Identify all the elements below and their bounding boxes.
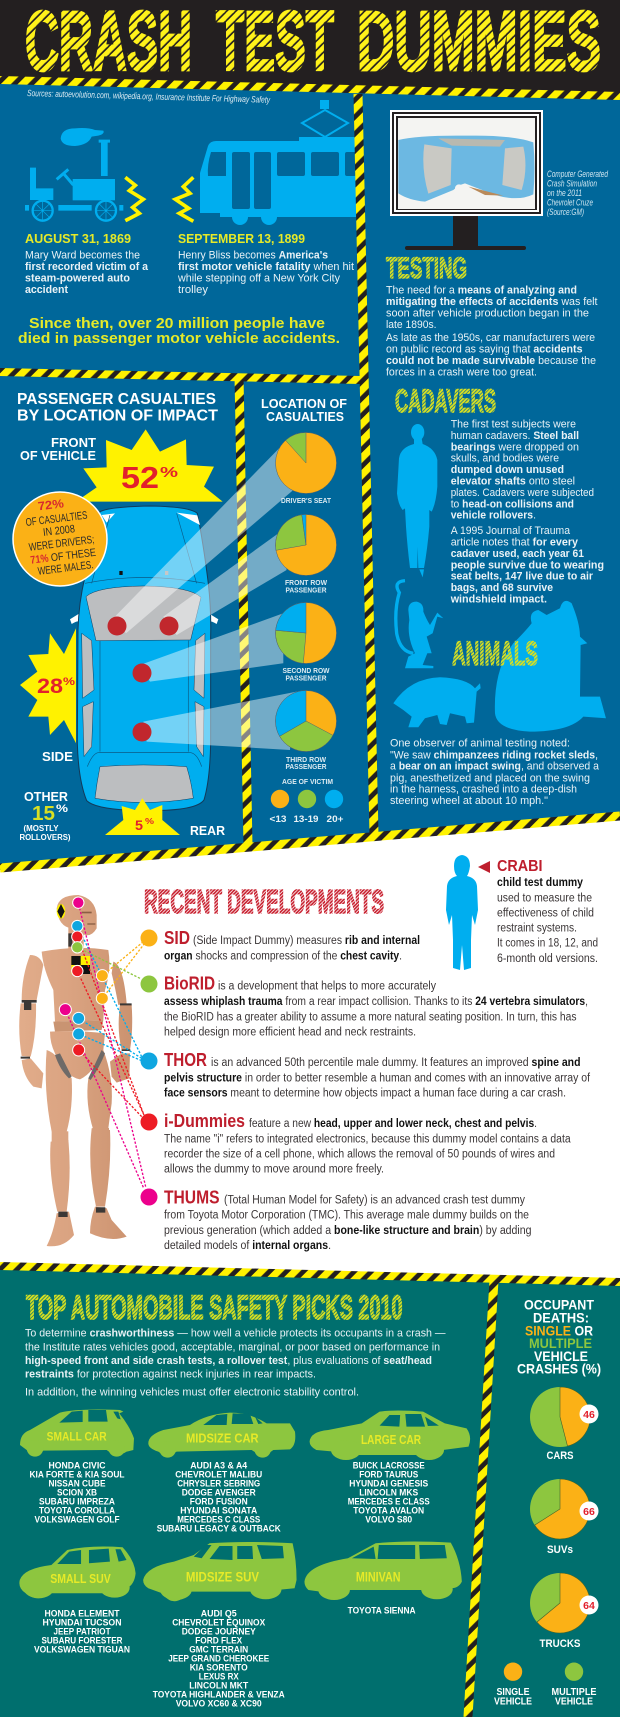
pie: trucks 64: TRUCKS xyxy=(540,1638,580,1650)
list: midsize cars: DODGE AVENGER xyxy=(182,1487,256,1498)
text: safety picks intro: high-speed front and side crash tests, a rollover test, plus evaluations of seat/head xyxy=(25,1355,432,1367)
sources line: Sources: autoevolution.com, wikipedia.org, Insurance Institute For Highway Safety xyxy=(27,88,270,105)
list: large cars: TOYOTA AVALON xyxy=(353,1505,424,1516)
text: August 1869: first recorded victim of a xyxy=(25,261,149,273)
text: CRABI: child test dummy xyxy=(497,877,584,889)
text: cadavers: skulls, and bodies were xyxy=(451,453,559,465)
list: midsize cars: AUDI A3 & A4 xyxy=(190,1460,248,1471)
heading: passenger casualties xyxy=(17,391,219,425)
panel: history and testing background xyxy=(0,80,620,870)
starburst: side 28%: 28 xyxy=(37,675,63,698)
legend: age of victim: <13 xyxy=(270,814,286,824)
icon: large car: LARGE CAR xyxy=(361,1433,421,1448)
stat: 72 percent drivers: OF CASUALTIES xyxy=(25,510,88,529)
label: rear: REAR xyxy=(190,824,225,838)
heading: occupant deaths xyxy=(517,1296,601,1377)
text: August 1869: steam-powered auto xyxy=(25,272,130,284)
car top view xyxy=(70,506,218,811)
list: small SUVs: HYUNDAI TUCSON xyxy=(42,1618,122,1629)
list: midsize SUVs xyxy=(153,1609,285,1710)
THOR entry: THOR xyxy=(164,1050,207,1070)
heading: location of casualties: CASUALTIES xyxy=(266,409,344,424)
stat: 72 percent drivers: WERE DRIVERS; xyxy=(28,534,95,554)
list: midsize SUVs: VOLVO XC60 & XC90 xyxy=(176,1699,262,1710)
text: safety picks intro: To determine crashworthiness — how well a vehicle protects its occupants in a crash — xyxy=(25,1328,446,1340)
SID entry: SID xyxy=(164,928,190,948)
list: midsize cars: HYUNDAI SONATA xyxy=(180,1505,257,1516)
text: testing: As late as the 1950s, car manufacturers were xyxy=(386,332,595,344)
heading: cadavers: CADAVERS xyxy=(395,383,496,419)
list: small SUVs: SUBARU FORESTER xyxy=(42,1636,123,1647)
text: testing: could not be made survivable because the xyxy=(386,355,596,367)
label: front of vehicle xyxy=(20,436,96,463)
list: midsize SUVs: TOYOTA HIGHLANDER & VENZA xyxy=(153,1690,285,1701)
text: September 1899: SEPTEMBER 13, 1899 xyxy=(178,232,305,246)
heading: testing: TESTING xyxy=(386,252,467,285)
text: cadavers: dumped down unused xyxy=(451,464,564,476)
BioRID entry: helped design more efficient head and neck restraints. xyxy=(164,1026,416,1038)
heading: location of casualties xyxy=(261,396,347,424)
text: August 1869: accident xyxy=(25,284,68,296)
text: cadavers xyxy=(450,418,604,606)
icon: human silhouette xyxy=(397,424,437,577)
text: testing: on public record as saying that accidents xyxy=(386,344,582,356)
list: small SUVs xyxy=(34,1609,130,1656)
list: small cars xyxy=(30,1460,125,1525)
pie labels: AGE OF VICTIM xyxy=(282,777,333,786)
text: testing: mitigating the effects of accidents was felt xyxy=(386,296,598,308)
pie labels: THIRD ROW xyxy=(286,755,327,764)
dummy sensor dots xyxy=(59,897,108,1056)
heading: occupant deaths: CRASHES (%) xyxy=(517,1361,601,1377)
icon: small car: SMALL CAR xyxy=(47,1430,107,1444)
text: cadavers: The first test subjects were xyxy=(451,418,576,430)
pie: SUVs 66: SUVs xyxy=(547,1544,573,1556)
label: side: SIDE xyxy=(42,750,73,764)
pie: SUVs 66: 66 xyxy=(583,1506,595,1518)
text: cadavers: plates. Cadavers were subjected xyxy=(451,487,594,499)
list: midsize SUVs: LEXUS RX xyxy=(199,1672,239,1683)
crash test dummy figure xyxy=(19,895,132,1246)
list: minivans: TOYOTA SIENNA xyxy=(348,1605,416,1616)
starburst: front 52%: 52 xyxy=(121,460,159,495)
monitor with crash simulation xyxy=(390,110,543,250)
pie: trucks 64 xyxy=(530,1573,598,1650)
legend: single or multiple vehicle: VEHICLE xyxy=(494,1697,532,1708)
text: CRABI: effectiveness of child xyxy=(497,908,594,920)
list: small cars: HONDA CIVIC xyxy=(48,1460,106,1471)
legend: age of victim: 13-19 xyxy=(294,814,318,824)
text: animals: steering wheel at about 10 mph." xyxy=(390,795,548,807)
SID entry: organ shocks and compression of the chest cavity. xyxy=(164,950,402,962)
i-Dummies entry: i-Dummies xyxy=(164,1111,245,1131)
stat: 72 percent drivers: IN 2008 xyxy=(42,523,76,539)
monitor caption: Chevrolet Cruze xyxy=(547,198,593,208)
pie labels: DRIVER'S SEAT xyxy=(281,496,331,505)
icon: small SUV: SMALL SUV xyxy=(50,1572,111,1587)
list: midsize SUVs: KIA SORENTO xyxy=(190,1663,248,1674)
icon: minivan xyxy=(304,1541,462,1600)
text: animals: in the harness, crashed into a deep-dish xyxy=(390,784,577,796)
heading: location of casualties: LOCATION OF xyxy=(261,396,347,411)
i-Dummies entry: The name "i" refers to integrated electronics, because this dummy model contains a data xyxy=(164,1133,571,1145)
text: CRABI: CRABI xyxy=(497,858,542,875)
text: testing: The need for a means of analyzing and xyxy=(386,284,577,296)
callout: 20 million xyxy=(18,315,340,347)
icon: large car xyxy=(310,1410,470,1460)
light beams from seats to pies xyxy=(113,444,297,750)
monitor caption: on the 2011 xyxy=(547,188,582,198)
stat: other 15%: ROLLOVERS) xyxy=(20,833,71,842)
stat: 72 percent drivers: 72% xyxy=(37,496,65,513)
i-Dummies entry xyxy=(140,1111,571,1176)
list: large cars: HYUNDAI GENESIS xyxy=(349,1478,428,1489)
text: testing: late 1890s. xyxy=(386,319,436,331)
starburst: front 52% xyxy=(76,429,223,502)
icon: midsize car: MIDSIZE CAR xyxy=(186,1430,259,1445)
heading: occupant deaths: SINGLE OR xyxy=(525,1322,593,1338)
text: testing: forces in a crash were too great. xyxy=(386,366,537,378)
text: CRABI xyxy=(497,858,598,965)
legend: age of victim xyxy=(270,790,344,824)
i-Dummies entry: recorder the size of a cell phone, which allows the removal of 50 pounds of wires and xyxy=(164,1149,555,1161)
monitor caption: Crash Simulation xyxy=(547,178,597,188)
list: midsize cars xyxy=(157,1460,281,1534)
monitor caption: (Source:GM) xyxy=(547,207,584,217)
CRABI arrow xyxy=(478,861,490,873)
list: midsize cars: CHRYSLER SEBRING xyxy=(177,1478,260,1489)
icon: midsize car xyxy=(148,1413,295,1458)
text: September 1899: trolley xyxy=(178,284,209,296)
label: front of vehicle: OF VEHICLE xyxy=(20,449,96,463)
stat: 72 percent drivers: WERE MALES. xyxy=(37,559,94,578)
BioRID entry: the BioRID has a greater ability to assume a more natural seating position. In turn, this has xyxy=(164,1011,577,1023)
stat: 72 percent drivers: 71% OF THESE xyxy=(30,547,97,567)
text: animals: "We saw chimpanzees riding rocket sleds, xyxy=(390,749,598,761)
text: safety picks intro: In addition, the winning vehicles must offer electronic stability control. xyxy=(25,1386,359,1398)
callout: 20 million: died in passenger motor vehicle accidents. xyxy=(18,330,340,347)
list: midsize SUVs: LINCOLN MKT xyxy=(189,1681,248,1692)
THUMS entry: previous generation (which added a bone-like structure and brain) by adding xyxy=(164,1225,532,1237)
stat: 72 percent drivers xyxy=(13,492,107,586)
text: cadavers: people survive due to wearing xyxy=(451,559,604,571)
text: CRABI: It comes in 18, 12, and xyxy=(497,938,598,950)
legend: single or multiple vehicle: VEHICLE xyxy=(555,1697,593,1708)
monitor caption xyxy=(547,169,609,217)
text: cadavers: seat belts, 147 live due to air xyxy=(451,571,594,583)
stat: other 15% xyxy=(20,790,71,842)
text: testing xyxy=(386,284,598,378)
icon: midsize SUV xyxy=(143,1542,297,1601)
SID entry xyxy=(140,928,420,962)
list: midsize cars: CHEVROLET MALIBU xyxy=(175,1469,262,1480)
pie: trucks 64: 64 xyxy=(583,1600,595,1612)
text: animals: a bear on an impact swing, and observed a xyxy=(390,761,600,773)
pie labels xyxy=(281,496,333,786)
heading: passenger casualties: BY LOCATION OF IMPACT xyxy=(17,408,219,425)
icon: steam tricycle xyxy=(25,128,123,221)
stat: other 15%: (MOSTLY xyxy=(24,824,59,833)
starburst: front 52%: % xyxy=(160,464,178,481)
starburst: rear 5% xyxy=(105,798,180,835)
text: safety picks intro: restraints for protection against neck injuries in rear impacts. xyxy=(25,1369,316,1381)
SID entry: (Side Impact Dummy) measures rib and internal xyxy=(193,935,420,947)
text: September 1899 xyxy=(177,232,354,296)
legend: single or multiple vehicle: SINGLE xyxy=(496,1687,530,1698)
THUMS entry: (Total Human Model for Safety) is an advanced crash test dummy xyxy=(224,1194,525,1206)
THOR entry: face sensors meant to determine how objects impact a human face during a car crash. xyxy=(164,1088,566,1100)
text: cadavers: to head-on collisions and xyxy=(451,498,574,510)
label: front of vehicle: FRONT xyxy=(51,436,96,450)
icon: trolley xyxy=(200,100,356,225)
pie: cars 46: 46 xyxy=(583,1409,595,1421)
heading: occupant deaths: VEHICLE xyxy=(534,1348,588,1364)
THOR entry: is an advanced 50th percentile male dummy. It features an improved spine and xyxy=(211,1057,580,1069)
icon: minivan: MINIVAN xyxy=(356,1570,401,1585)
text: safety picks intro: the Institute rates vehicles good, acceptable, marginal, or poor based on performance in xyxy=(25,1341,440,1353)
text: August 1869 xyxy=(25,232,149,296)
seat markers xyxy=(108,616,178,742)
title xyxy=(25,0,601,88)
heading: occupant deaths: MULTIPLE xyxy=(529,1335,592,1351)
THUMS entry: detailed models of internal organs. xyxy=(164,1240,331,1252)
pie: cars 46: CARS xyxy=(546,1450,574,1462)
starburst: rear 5%: % xyxy=(145,817,154,826)
callout: 20 million: Since then, over 20 million people have xyxy=(29,315,325,332)
stat: other 15%: % xyxy=(56,803,68,815)
legend: single or multiple vehicle: MULTIPLE xyxy=(552,1687,597,1698)
list: midsize SUVs: CHEVROLET EQUINOX xyxy=(172,1618,266,1629)
list: large cars: FORD TAURUS xyxy=(359,1469,418,1480)
list: midsize SUVs: DODGE JOURNEY xyxy=(182,1627,256,1638)
i-Dummies entry: allows the dummy to move around more freely. xyxy=(164,1164,384,1176)
pie: driver's seat xyxy=(276,432,336,494)
text: September 1899: Henry Bliss becomes America's xyxy=(178,250,328,262)
list: small cars: TOYOTA COROLLA xyxy=(39,1505,115,1516)
text: cadavers: human cadavers. Steel ball xyxy=(451,430,579,442)
list: small SUVs: HONDA ELEMENT xyxy=(44,1609,120,1620)
THUMS entry: THUMS xyxy=(164,1187,220,1207)
list: large cars: MERCEDES E CLASS xyxy=(348,1496,430,1507)
heading: occupant deaths: OCCUPANT xyxy=(524,1296,594,1312)
pie labels: FRONT ROW xyxy=(285,578,328,587)
icon: child dummy silhouette xyxy=(446,855,478,970)
icon: monkey silhouette xyxy=(396,581,443,668)
text: cadavers: cadaver used, each year 61 xyxy=(451,548,584,560)
THUMS entry: from Toyota Motor Corporation (TMC). This average male dummy builds on the xyxy=(164,1210,529,1222)
i-Dummies entry: feature a new head, upper and lower neck, chest and pelvis. xyxy=(249,1118,537,1130)
text: CRABI: used to measure the xyxy=(497,892,592,904)
header background xyxy=(0,0,620,104)
heading: passenger casualties: PASSENGER CASUALTIES xyxy=(17,391,216,408)
list: small cars: VOLKSWAGEN GOLF xyxy=(34,1514,120,1525)
pie: third row xyxy=(275,690,336,752)
text: animals: One observer of animal testing noted: xyxy=(390,738,570,750)
list: midsize cars: MERCEDES C CLASS xyxy=(177,1514,260,1525)
pie labels: PASSENGER xyxy=(286,674,327,682)
list: midsize SUVs: AUDI Q5 xyxy=(201,1609,237,1620)
heading: animals: ANIMALS xyxy=(452,635,538,673)
list: large cars: LINCOLN MKS xyxy=(359,1487,418,1498)
text: testing: soon after vehicle production began in the xyxy=(386,308,589,320)
BioRID entry: assess whiplash trauma from a rear impact collision. Thanks to its 24 vertebra simulators, xyxy=(164,996,588,1008)
text: September 1899: first motor vehicle fatality when hit xyxy=(178,261,354,273)
list: midsize SUVs: GMC TERRAIN xyxy=(189,1645,248,1656)
text: safety picks intro xyxy=(25,1328,446,1398)
icon: midsize SUV: MIDSIZE SUV xyxy=(186,1570,260,1585)
BioRID entry: is a development that helps to more accurately xyxy=(218,980,436,992)
text: August 1869: AUGUST 31, 1869 xyxy=(25,232,131,246)
heading: recent developments: RECENT DEVELOPMENTS xyxy=(144,883,384,920)
starburst: side 28% xyxy=(20,628,76,743)
text: cadavers: elevator shafts onto steel xyxy=(451,475,575,487)
connector lines xyxy=(65,903,146,1187)
starburst: side 28%: % xyxy=(63,676,75,688)
text: cadavers: article notes that for every xyxy=(451,537,579,549)
list: midsize SUVs: FORD FLEX xyxy=(195,1636,243,1647)
icon: crash burst right xyxy=(175,177,193,221)
text: cadavers: bags, and 68 survive xyxy=(451,582,553,594)
pie labels: PASSENGER xyxy=(286,762,327,771)
starburst: rear 5%: 5 xyxy=(135,817,143,833)
THOR entry xyxy=(140,1050,591,1100)
text: cadavers: windshield impact. xyxy=(450,594,547,606)
pie: front row xyxy=(276,514,336,576)
list: large cars xyxy=(348,1460,430,1525)
text: CRABI: 6-month old versions. xyxy=(497,953,598,965)
icon: crash burst left xyxy=(125,177,143,221)
text: animals xyxy=(390,738,600,807)
list: large cars: VOLVO S80 xyxy=(365,1514,412,1525)
text: CRABI: restraint systems. xyxy=(497,923,577,935)
list: small cars: SUBARU IMPREZA xyxy=(39,1496,115,1507)
pie labels: PASSENGER xyxy=(286,586,327,594)
icon: bear silhouette xyxy=(495,601,606,732)
heading: occupant deaths: DEATHS: xyxy=(533,1310,589,1326)
pie labels: SECOND ROW xyxy=(282,666,330,675)
text: cadavers: bearings were dropped on xyxy=(451,441,579,453)
pie: cars 46 xyxy=(530,1387,598,1462)
pie: SUVs 66 xyxy=(530,1479,598,1556)
list: midsize cars: FORD FUSION xyxy=(190,1496,248,1507)
list: small SUVs: JEEP PATRIOT xyxy=(54,1627,111,1638)
icon: pig silhouette xyxy=(393,677,481,727)
BioRID entry xyxy=(140,973,588,1038)
list: large cars: BUICK LACROSSE xyxy=(353,1460,425,1471)
icon: small car xyxy=(20,1410,134,1457)
legend: single or multiple vehicle xyxy=(494,1662,597,1708)
text: September 1899: while stepping off a New York City xyxy=(177,272,340,284)
list: midsize cars: SUBARU LEGACY & OUTBACK xyxy=(157,1523,281,1534)
list: small SUVs: VOLKSWAGEN TIGUAN xyxy=(34,1645,130,1656)
text: cadavers: A 1995 Journal of Trauma xyxy=(451,525,571,537)
stat: other 15%: 15 xyxy=(32,803,55,825)
BioRID entry: BioRID xyxy=(164,973,215,993)
THUMS entry xyxy=(140,1187,532,1252)
list: small cars: SCION XB xyxy=(57,1487,97,1498)
THOR entry: pelvis structure in order to better resemble a human and comes with an innovative array of xyxy=(164,1072,591,1084)
text: August 1869: Mary Ward becomes the xyxy=(25,250,140,262)
text: animals: pig, anesthetized and placed on the swing xyxy=(390,772,590,784)
panel: safety picks background xyxy=(0,1266,620,1717)
icon: small SUV xyxy=(19,1547,136,1598)
legend: age of victim: 20+ xyxy=(326,814,344,824)
stat: other 15%: OTHER xyxy=(24,790,68,804)
list: small cars: NISSAN CUBE xyxy=(48,1478,106,1489)
list: small cars: KIA FORTE & KIA SOUL xyxy=(30,1469,125,1480)
text: cadavers: vehicle rollovers. xyxy=(451,510,536,522)
pie: second row xyxy=(275,602,336,664)
list: midsize SUVs: JEEP GRAND CHEROKEE xyxy=(168,1654,269,1665)
